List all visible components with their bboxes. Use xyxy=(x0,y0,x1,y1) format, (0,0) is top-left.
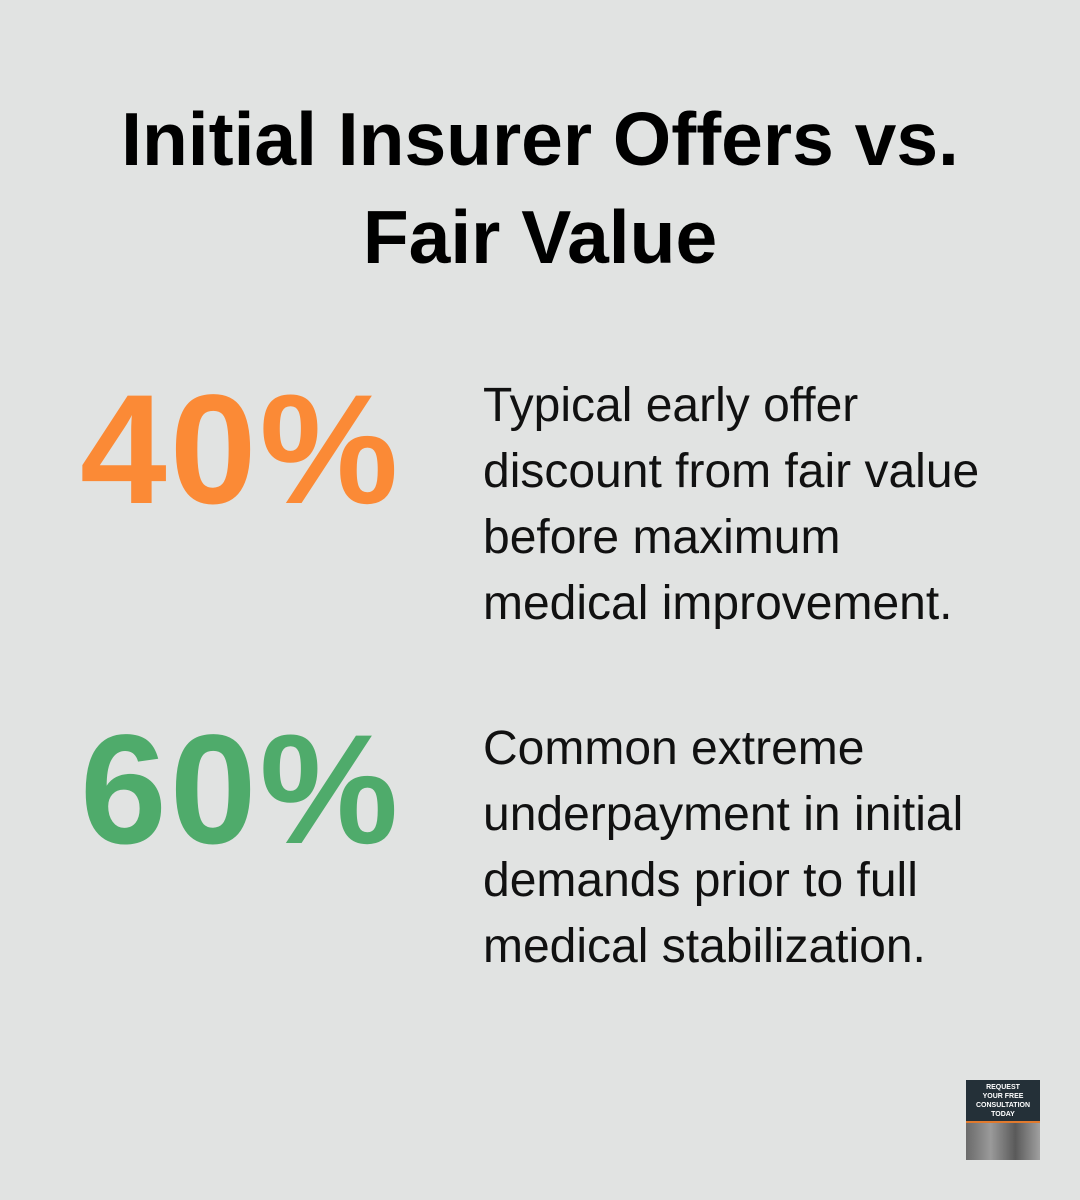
logo: consultation badge xyxy=(966,1080,1040,1160)
text: 40% description: before maximum xyxy=(483,511,840,564)
stat: 60%: 60% xyxy=(80,703,401,877)
text: 60% description: Common extreme xyxy=(483,722,864,775)
text: 40% description: medical improvement. xyxy=(483,577,952,630)
text: 40% description xyxy=(483,379,979,630)
title: Initial Insurer Offers vs. xyxy=(121,97,959,181)
text: 40% description: Typical early offer xyxy=(483,379,858,432)
text: 60% description: demands prior to full xyxy=(483,854,918,907)
text: 60% description xyxy=(483,722,963,973)
text: 60% description: medical stabilization. xyxy=(483,920,926,973)
title xyxy=(121,97,959,279)
text: 40% description: discount from fair value xyxy=(483,445,979,498)
logo: consultation badge: YOUR FREE xyxy=(983,1093,1023,1100)
title: Fair Value xyxy=(363,195,717,279)
logo: consultation badge: REQUEST xyxy=(986,1084,1020,1091)
stat: 40%: 40% xyxy=(80,363,401,537)
logo: consultation badge: CONSULTATION xyxy=(976,1102,1030,1109)
text: 60% description: underpayment in initial xyxy=(483,788,963,841)
logo: consultation badge: TODAY xyxy=(991,1111,1015,1118)
